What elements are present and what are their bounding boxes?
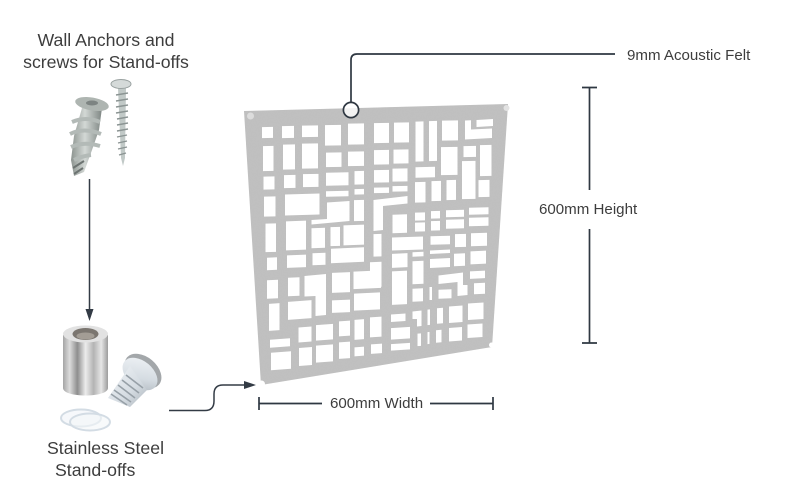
standoff holes: [247, 112, 254, 120]
acoustic felt panel: [244, 104, 510, 388]
washers: [61, 410, 101, 426]
anchor flange: [74, 95, 110, 113]
label: wall anchors: Wall Anchors and: [38, 30, 174, 50]
barrel: [63, 335, 108, 396]
label: wall anchors: screws for Stand-offs: [23, 52, 189, 72]
icon: wall anchor and screw: [70, 80, 131, 176]
label: stainless steel stand-offs: Stand-offs: [55, 460, 135, 480]
height dimension: [582, 88, 597, 343]
screw head: [111, 80, 131, 88]
label: stainless steel stand-offs: Stainless Steel: [47, 438, 164, 458]
panel body: [244, 104, 508, 385]
anchor threads: [70, 119, 101, 160]
arrow: stand-off to panel: [169, 381, 256, 410]
bolt thread: [108, 366, 147, 407]
leader line: acoustic felt: [343, 54, 615, 118]
screw shaft: [118, 88, 126, 166]
label: 9mm Acoustic Felt: 9mm Acoustic Felt: [627, 47, 751, 64]
arrow: anchors to stand-offs: [86, 179, 94, 321]
label: 600mm Width: 600mm Width: [330, 395, 423, 412]
width dimension: [259, 397, 493, 410]
bolt head: [118, 347, 168, 395]
label: 600mm Height: 600mm Height: [539, 201, 638, 218]
anchor body: [71, 108, 102, 176]
icon: stainless steel stand-off: [61, 326, 168, 430]
panel cut-outs: [262, 119, 493, 370]
